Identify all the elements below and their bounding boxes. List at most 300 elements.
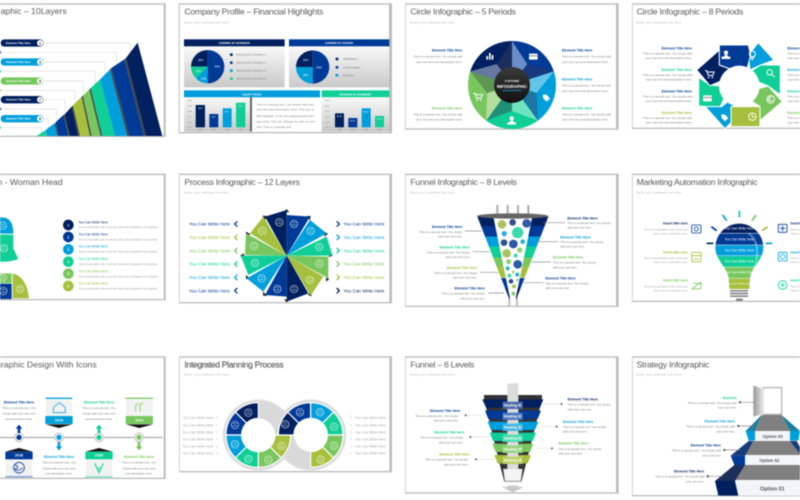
light bulb: You Can Write Here xyxy=(726,281,753,285)
year card 2020: 2020 xyxy=(95,454,103,458)
stairs: Option 01 xyxy=(760,487,785,493)
slide: funnel 6 levels xyxy=(405,356,619,494)
label: left bottom xyxy=(413,107,463,122)
right labels: Element Title Here xyxy=(558,442,589,446)
left labels with chevrons: You Can Write Here xyxy=(189,222,230,227)
left labels: Element Title Here xyxy=(662,68,692,72)
card: earning by business: EARNING BY BUSINESS xyxy=(219,41,250,45)
right labels: add your own text. xyxy=(553,265,578,269)
title: Circle Infographic – 8 Periods xyxy=(637,7,744,17)
card: earning by business: Earning by business 2 xyxy=(237,61,266,65)
left labels: This is a sample text. You simply add xyxy=(643,116,692,120)
left labels with chevrons xyxy=(189,221,237,293)
card: revenue by business bar chart: $0.28 xyxy=(350,120,356,122)
timeline text: 2020 xyxy=(82,400,116,421)
sample text block: fully editable. It can be replaced with your xyxy=(256,114,314,118)
right labels: Element Title Here xyxy=(563,420,593,424)
left labels: This is a sample text. You simply add xyxy=(643,73,692,77)
left labels: your own text and description here. xyxy=(646,77,692,81)
subhead: Enter your subhead line here xyxy=(637,373,681,377)
timeline text: 2018: simply add your own text xyxy=(3,412,36,416)
card: equity ratio bar chart: $0.9 xyxy=(239,106,243,108)
card: equity ratio bar chart: 2020 xyxy=(225,130,230,132)
right labels with chevrons: You Can Write Here xyxy=(343,235,385,240)
right labels: add your own text. xyxy=(563,430,588,434)
right labels: You Can Write Here xyxy=(355,452,386,456)
timeline text: 2021: Element Title Here xyxy=(124,455,154,459)
timeline text: 2020: simply add your own text xyxy=(83,412,116,416)
slide: circle infographic 8 periods xyxy=(632,3,800,129)
labels: your own text. xyxy=(716,429,735,433)
card: equity ratio bar chart: 2021 xyxy=(238,130,243,132)
numbered list: 6 xyxy=(67,284,69,288)
left labels: Sed ut perspiciatis unde omnis iste xyxy=(644,284,688,288)
right labels: You Can Write Here xyxy=(355,423,386,427)
card: earning by business: Earning by business 3 xyxy=(237,69,266,73)
timeline text: 2019: and description here. xyxy=(45,472,73,476)
right labels: You Can Write Here xyxy=(355,437,386,441)
title: Funnel – 6 Levels xyxy=(410,359,475,369)
left labels: This is a sample text. You simply xyxy=(415,414,459,418)
timeline text: 2018 xyxy=(2,400,36,421)
right labels: add your own text. xyxy=(560,245,585,249)
card: earning by business: 13% xyxy=(196,69,202,73)
label connectors xyxy=(706,401,755,477)
left line icons xyxy=(692,225,701,289)
light bulb: You Can Write Here xyxy=(725,227,754,231)
right labels with chevrons xyxy=(337,221,385,293)
infinity loop chart xyxy=(223,399,346,471)
label: right middle: your own text and description here. xyxy=(562,89,609,93)
five-period wheel: INFOGRAPHIC xyxy=(497,84,527,89)
title: Integrated Planning Process xyxy=(184,359,284,369)
label: right middle: This is a sample text. You simply add xyxy=(562,84,611,88)
right labels: This is a sample text. You simply xyxy=(553,261,597,265)
sample text block: own text and description here. This text is xyxy=(256,108,314,112)
labels: your own text. xyxy=(718,405,737,409)
label: left top: Element Title Here xyxy=(432,49,462,53)
left labels: Insert title here xyxy=(663,250,688,254)
six-level funnel: Heading 04 xyxy=(504,437,522,441)
card: earning by business: 50% xyxy=(215,65,221,69)
timeline text: 2019: This is a sample text. You xyxy=(42,461,76,465)
slide: pyramid infographic 10 layers xyxy=(0,3,166,137)
left labels with chevrons: You Can Write Here xyxy=(189,248,230,253)
label: left bottom: This is a sample text. You simply add xyxy=(413,113,463,117)
diagonal layers xyxy=(37,43,162,136)
card: equity ratio bar chart: $0.5 xyxy=(212,117,216,119)
twelve-layer wheel xyxy=(240,209,333,302)
numbered list: You Can Write Here xyxy=(78,282,108,286)
element pills: 3 xyxy=(39,60,41,64)
year card 2019: 2019 xyxy=(55,418,63,422)
left labels: your own text and description here. xyxy=(646,99,692,103)
title: Company Profile – Financial Highlights xyxy=(184,7,324,17)
labels: This is a sample text. You simply add xyxy=(688,401,737,405)
card: equity ratio bar chart: $0.7 xyxy=(225,111,229,113)
left labels: You Can Write Here xyxy=(183,437,213,441)
card: equity ratio bar chart: 2019 xyxy=(211,130,217,132)
left labels: add your own text. xyxy=(461,296,485,300)
card: revenue by business bar chart xyxy=(322,90,389,132)
right labels: This is a sample text. You simply xyxy=(568,403,611,407)
timeline text: 2019 xyxy=(42,455,76,476)
open door xyxy=(753,386,782,416)
card: earning by region: EARNING BY REGION xyxy=(325,41,353,45)
left labels: your own text and description here. xyxy=(646,56,692,60)
left labels: You Can Write Here xyxy=(183,416,213,420)
label: right top: your own text and description here. xyxy=(562,60,609,64)
subhead: Enter your subhead line here xyxy=(410,191,455,195)
subhead: Enter your subhead line here xyxy=(637,191,681,195)
card: revenue by business bar chart: $0.42 xyxy=(364,111,368,113)
right labels with chevrons: You Can Write Here xyxy=(343,262,385,267)
timeline text: 2018: Element Title Here xyxy=(4,400,34,404)
label: right bottom: your own text and description here. xyxy=(562,118,609,122)
right labels with chevrons: You Can Write Here xyxy=(343,288,385,293)
labels: This is a sample text. You simply add xyxy=(672,449,721,453)
year card 2021 xyxy=(126,398,153,428)
five-period wheel: 6 OPTIONS xyxy=(505,79,519,83)
numbered list: You Can Write Here xyxy=(78,220,108,224)
element pills: 7 xyxy=(39,98,41,102)
element pills: 1 xyxy=(39,41,41,45)
left labels: natus error voluptatem rem. xyxy=(653,288,688,292)
timeline text: 2020: Element Title Here xyxy=(84,400,114,404)
element pills xyxy=(0,39,43,129)
left labels: Element Title Here xyxy=(434,431,465,435)
numbered list: 1 xyxy=(67,223,69,227)
left labels xyxy=(644,222,688,292)
right line icons xyxy=(778,224,787,289)
right labels: This is a sample text. You simply xyxy=(567,221,611,225)
right labels: add your own text. xyxy=(558,452,583,456)
element pills: 5 xyxy=(39,79,41,83)
label: right bottom: Element Title Here xyxy=(562,107,592,111)
labels: Element Title Here xyxy=(691,444,721,448)
left labels: This is a sample text. You simply add xyxy=(643,94,692,98)
subhead: Enter your subhead line here xyxy=(410,20,455,24)
left labels: add your own text. xyxy=(438,235,462,239)
right labels: You Can Write Here xyxy=(355,430,386,434)
right labels: Element Title Here xyxy=(567,216,598,220)
light bulb: You Can Write Here xyxy=(725,238,754,242)
left labels xyxy=(643,47,692,125)
left labels: Sed ut perspiciatis unde omnis iste xyxy=(644,256,688,260)
left labels with chevrons: You Can Write Here xyxy=(189,288,230,293)
title: Funnel Infographic – 8 Levels xyxy=(410,177,518,187)
six-level funnel xyxy=(482,383,543,492)
right labels xyxy=(787,47,800,125)
numbered list: You Can Write Here xyxy=(78,245,108,249)
panel: middle row right tiles xyxy=(405,174,800,307)
stairs: Option 03 xyxy=(763,434,783,439)
left labels: This is a sample text. You simply xyxy=(442,292,485,296)
slide: integrated planning process xyxy=(179,356,392,472)
timeline nodes and arrows xyxy=(15,425,143,450)
slide: company profile financial highlights xyxy=(179,3,392,133)
timeline text: 2020: and description here. xyxy=(85,417,113,421)
slide: diagram woman head xyxy=(0,174,166,300)
label: left top: your own text and description here. xyxy=(416,60,463,64)
left labels xyxy=(183,416,218,456)
left labels: add your own text. xyxy=(453,276,477,280)
left labels with chevrons: You Can Write Here xyxy=(189,235,230,240)
labels: Success xyxy=(723,396,737,400)
label: right bottom xyxy=(562,107,611,122)
label: right middle xyxy=(562,78,611,93)
label: right top: Element Title Here xyxy=(562,49,592,53)
card: earning by region: 25% xyxy=(303,73,309,77)
right labels with chevrons: You Can Write Here xyxy=(343,275,385,280)
card: earning by region: United states xyxy=(343,65,361,69)
timeline text: 2019: Element Title Here xyxy=(44,455,74,459)
element pills: Element Title Here xyxy=(6,79,31,83)
card: earning by region: 25% xyxy=(303,58,309,62)
left labels: This is a sample text. You simply xyxy=(427,251,470,255)
slide: marketing automation infographic xyxy=(632,174,800,302)
left labels: add your own text. xyxy=(434,419,458,423)
panel: top row right tiles xyxy=(405,3,800,130)
timeline text: 2021 xyxy=(122,455,156,476)
card: earning by business: 13% xyxy=(201,76,207,80)
title: Marketing Automation Infographic xyxy=(637,177,758,187)
card: revenue by business bar chart: $0.38 xyxy=(337,116,343,118)
card: revenue by business bar chart: $0.30 xyxy=(377,119,383,121)
sample text block: This is a sample text. You simply add your xyxy=(256,103,314,107)
timeline text: 2019: simply add your own text xyxy=(43,466,76,470)
right labels xyxy=(350,416,386,456)
left labels: You Can Write Here xyxy=(183,445,213,449)
right labels: Element Title Here xyxy=(560,235,591,239)
card: revenue by business bar chart: 2018 xyxy=(337,130,342,132)
callout arrows xyxy=(465,223,565,293)
year card 2018: 2018 xyxy=(15,454,23,458)
panel: bottom row right tiles xyxy=(405,356,800,496)
labels: your own text. xyxy=(686,479,705,483)
left labels: Element Title Here xyxy=(447,266,477,270)
left labels: You Can Write Here xyxy=(183,423,213,427)
card: revenue by business bar chart: REVENUE BY BUSINESS xyxy=(340,92,371,96)
left labels xyxy=(415,409,470,466)
subhead: Enter your subhead line here xyxy=(637,20,681,24)
right labels xyxy=(558,397,611,456)
subhead: Enter your subhead line here xyxy=(184,191,229,195)
panel: bottom row left tiles xyxy=(0,356,392,479)
element pills: 9 xyxy=(39,117,41,121)
light bulb: You Can Write Here xyxy=(725,248,754,252)
year card 2019 xyxy=(45,398,73,428)
numbered list: 5 xyxy=(67,272,69,276)
left labels: Element Title Here xyxy=(430,409,460,413)
element pills: Element Title Here xyxy=(6,60,31,64)
numbered list: Sed ut perspiciatis unde omnis iste natus error voluptatem rem aperiam xyxy=(78,250,158,254)
slide: funnel infographic 8 levels xyxy=(405,174,619,307)
sample text block xyxy=(256,103,315,129)
label: right top xyxy=(562,49,611,64)
numbered list: Sed ut perspiciatis unde omnis iste natus error voluptatem rem aperiam xyxy=(78,225,158,229)
six-level funnel: Heading 05 xyxy=(504,448,522,452)
numbered list: You Can Write Here xyxy=(78,233,108,237)
timeline text: 2021: This is a sample text. You xyxy=(122,461,156,465)
right labels with chevrons: You Can Write Here xyxy=(343,222,385,227)
eight-period ring xyxy=(697,43,782,129)
right labels: This is a sample text. You simply xyxy=(558,447,602,451)
card: revenue by business bar chart: 2021 xyxy=(377,130,382,132)
six-level funnel: Heading 01 xyxy=(504,404,522,408)
right labels: You Can Write Here xyxy=(355,416,386,420)
labels: This is a sample text. You simply add xyxy=(686,425,735,429)
left labels: Insert title here xyxy=(663,279,688,283)
slide: infographic design with icons timeline xyxy=(0,356,166,479)
labels: Element Title Here xyxy=(674,470,704,474)
card: earning by region: GERMANY xyxy=(343,57,358,61)
label: left bottom: Element Title Here xyxy=(432,107,462,111)
title: Process Infographic – 12 Layers xyxy=(184,177,301,187)
right labels: Element Title Here xyxy=(553,256,583,260)
card: earning by business: Earning by business 4 xyxy=(237,77,266,81)
card: revenue by business bar chart: 2019 xyxy=(350,130,356,132)
left labels: You Can Write Here xyxy=(183,430,213,434)
slide: process infographic 12 layers xyxy=(179,174,392,303)
right labels xyxy=(791,222,800,292)
left labels: This is a sample text. You simply xyxy=(420,436,464,440)
five-period wheel xyxy=(468,41,556,129)
numbered list xyxy=(63,220,158,291)
left labels xyxy=(419,225,485,300)
card: earning by region: 50% xyxy=(317,65,323,69)
left labels: Element Title Here xyxy=(662,47,692,51)
woman head silhouette xyxy=(0,217,29,299)
callout connectors xyxy=(465,403,563,460)
light bulb: You Can Write Here xyxy=(725,260,754,264)
left labels: Element Title Here xyxy=(455,286,485,290)
card: equity ratio bar chart: EQUITY RATIO xyxy=(243,92,261,96)
card: equity ratio bar chart: 2018 xyxy=(198,130,203,132)
timeline line xyxy=(0,436,163,439)
timeline text: 2018: This is a sample text. You xyxy=(2,406,36,410)
element pills: Element Title Here xyxy=(6,117,31,121)
right labels: This is a sample text. You simply xyxy=(563,425,607,429)
sample text block: own style. You can change its color or font xyxy=(256,119,315,123)
card: earning by business: Earning by business 1 xyxy=(237,53,266,57)
left labels: add your own text. xyxy=(439,440,463,444)
slide: circle infographic 5 periods xyxy=(405,3,619,130)
left labels: Element Title Here xyxy=(662,90,692,94)
connector lines xyxy=(0,43,130,133)
right labels: add your own text. xyxy=(545,286,570,290)
labels: your own text. xyxy=(702,453,721,457)
light bulb xyxy=(707,211,772,301)
card: equity ratio bar chart xyxy=(184,90,320,132)
year card 2020 xyxy=(85,448,113,477)
left labels: add your own text. xyxy=(444,462,468,466)
right labels: Element Title Here xyxy=(568,397,598,401)
funnel with bubbles xyxy=(477,205,548,306)
card: earning by business: 25% xyxy=(198,58,204,62)
right labels with chevrons: You Can Write Here xyxy=(343,248,385,253)
left labels: Element Title Here xyxy=(439,453,470,457)
left labels: You Can Write Here xyxy=(183,452,213,456)
card: revenue by business bar chart: 2020 xyxy=(364,130,369,132)
labels: Element Title Here xyxy=(705,420,735,424)
right labels: This is a sample text. You simply xyxy=(560,240,604,244)
left labels: This is a sample text. You simply xyxy=(419,230,463,234)
sample text block: size. This is a sample text. xyxy=(256,125,292,129)
title: Circle Infographic – 5 Periods xyxy=(410,7,517,17)
left labels: your own text and description here. xyxy=(646,121,692,125)
label: left top: This is a sample text. You simply add xyxy=(413,54,463,58)
six-level funnel: Heading 02 xyxy=(504,415,522,419)
numbered list: You Can Write Here xyxy=(78,257,108,261)
label: left bottom: your own text and description here. xyxy=(416,118,463,122)
year card 2018 xyxy=(5,448,33,477)
left labels with chevrons: You Can Write Here xyxy=(189,275,230,280)
element pills: Element Title Here xyxy=(6,41,31,45)
numbered list: 4 xyxy=(67,260,69,264)
slide: strategy infographic xyxy=(632,356,800,496)
numbered list: Sed ut perspiciatis unde omnis iste natus error voluptatem rem aperiam xyxy=(78,287,158,291)
light bulb: You Can Write Here xyxy=(725,271,754,275)
labels xyxy=(655,396,737,483)
timeline text: 2021: and description here. xyxy=(125,472,153,476)
left labels: This is a sample text. You simply add xyxy=(643,51,692,55)
subhead: Enter your subhead line here xyxy=(184,373,229,377)
numbered list: Sed ut perspiciatis unde omnis iste natus error voluptatem rem aperiam xyxy=(78,262,158,266)
subhead: Enter your subhead line here xyxy=(410,373,455,377)
left labels with chevrons: You Can Write Here xyxy=(189,262,230,267)
card: earning by business xyxy=(184,39,285,87)
left labels: natus error voluptatem rem. xyxy=(653,231,688,235)
right labels: add your own text. xyxy=(568,407,592,411)
timeline text: 2021: simply add your own text xyxy=(123,466,156,470)
right labels: You Can Write Here xyxy=(355,445,386,449)
left labels: Element Title Here xyxy=(662,111,692,115)
label: right bottom: This is a sample text. You simply add xyxy=(562,113,611,117)
numbered list: 3 xyxy=(67,248,69,252)
six-level funnel: Heading 03 xyxy=(504,426,522,430)
left labels: This is a sample text. You simply xyxy=(434,271,478,275)
label: right middle: Element Title Here xyxy=(562,78,592,82)
stairs xyxy=(715,415,800,496)
left labels: Element Title Here xyxy=(440,245,470,249)
left labels: natus error voluptatem rem. xyxy=(653,260,688,264)
title: Strategy Infographic xyxy=(637,359,710,369)
element pills: Element Title Here xyxy=(6,98,31,102)
numbered list: Sed ut perspiciatis unde omnis iste natus error voluptatem rem aperiam xyxy=(78,274,158,278)
left labels: Element Title Here xyxy=(432,225,462,229)
right labels xyxy=(545,216,611,290)
timeline text: 2018: and description here. xyxy=(5,417,33,421)
numbered list: 2 xyxy=(67,235,69,239)
left labels: Insert title here xyxy=(663,222,688,226)
numbered list: You Can Write Here xyxy=(78,269,108,273)
card: equity ratio bar chart: $0.8 xyxy=(198,108,203,110)
left labels: Sed ut perspiciatis unde omnis iste xyxy=(644,227,688,231)
labels: This is a sample text. You simply add xyxy=(655,475,705,479)
label: right top: This is a sample text. You simply add xyxy=(562,54,611,58)
card: earning by region xyxy=(289,39,389,87)
right labels: Element Title Here xyxy=(545,276,576,280)
timeline text: 2020: This is a sample text. You xyxy=(82,406,116,410)
subhead: Enter your subhead line here xyxy=(184,20,229,24)
left labels: add your own text. xyxy=(446,255,470,259)
six-level funnel: Heading 06 xyxy=(504,459,522,463)
numbered list: Sed ut perspiciatis unde omnis iste natus error voluptatem rem aperiam xyxy=(78,237,158,241)
year card 2021: 2021 xyxy=(135,418,143,422)
panel: middle row left tiles xyxy=(0,174,392,303)
right labels: This is a sample text. You simply xyxy=(545,281,589,285)
